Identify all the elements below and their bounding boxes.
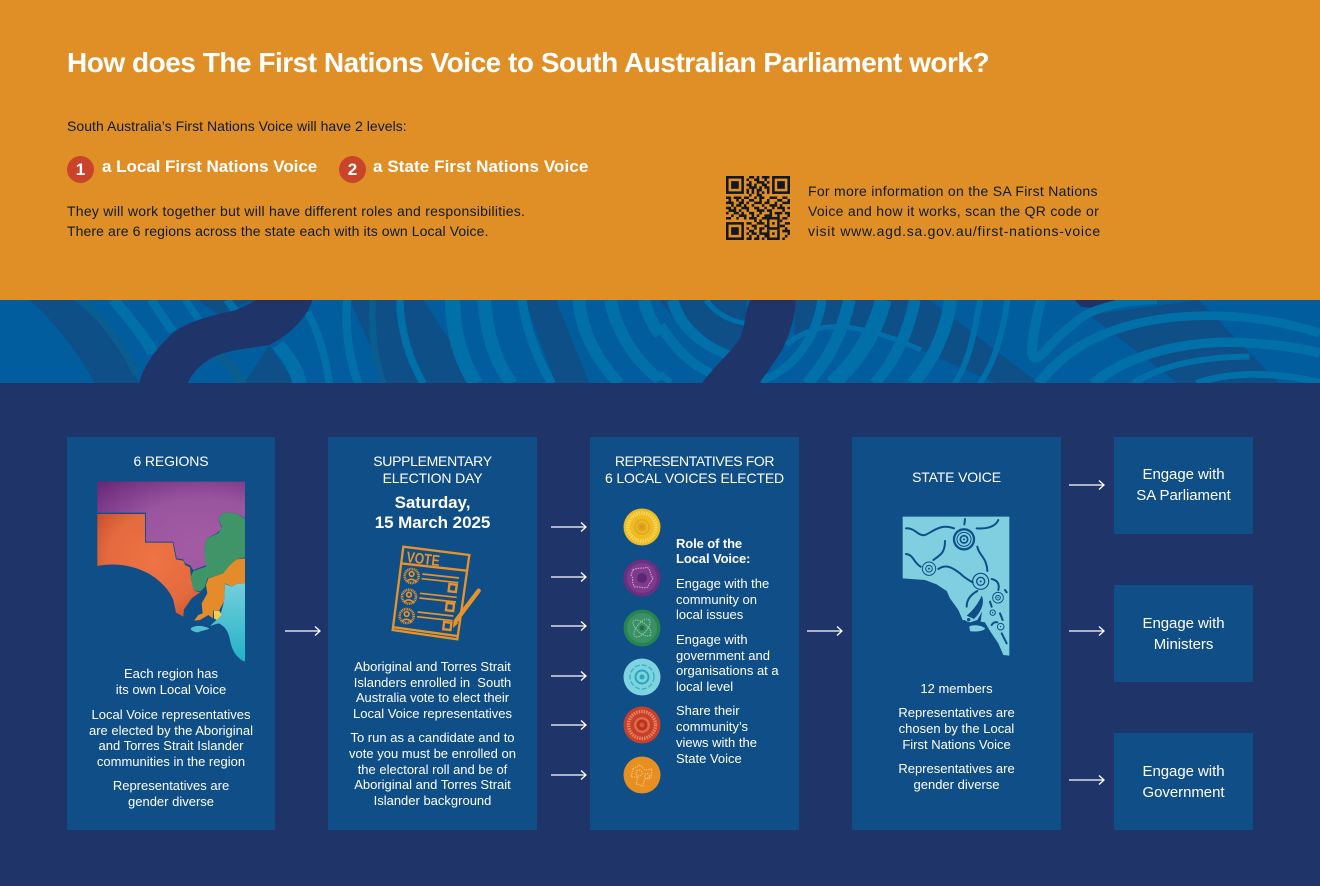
label: SA Parliament: SA Parliament [1136,487,1231,504]
label: Ministers: Ministers [1154,636,1213,653]
text: candidate eligibility: vote you must be enrolled on [349,746,516,761]
level 1 badge [67,156,94,183]
text: gender diverse: gender diverse [128,794,214,809]
icon: yellow coin [624,508,660,546]
text: chosen by local voice: Representatives are [898,705,1015,720]
role: government: organisations at a [676,663,779,678]
label: Ministers [1142,615,1224,653]
heading: 6 regions: 6 REGIONS [134,453,208,469]
role: community: Engage with the [676,576,769,591]
icon: red coin [624,706,660,744]
panel: representatives for 6 local voices [590,437,799,830]
text: candidate eligibility [349,730,516,808]
arrows: election to local voices [551,522,587,780]
text: who votes: Australia vote to elect their [356,690,509,705]
swoosh right [702,300,796,383]
QR information text [808,183,1101,239]
text: gender diverse: gender diverse [914,777,1000,792]
icon: orange coin [624,756,660,794]
region: orange [194,558,245,621]
text: who votes: Islanders enrolled in South [354,675,511,690]
region: red [97,514,200,617]
QR information text: visit www.agd.sa.gov.au/first-nations-voice [808,223,1101,239]
icon: ballot paper [391,545,481,641]
intro text: South Australia’s First Nations Voice will have 2 levels: [67,118,407,134]
text: local voice [116,666,226,697]
title: How does The First Nations Voice to South Australian Parliament work? [67,47,989,78]
text: candidate eligibility: To run as a candidate and to [350,730,515,745]
level 2 label: a State First Nations Voice [373,157,588,176]
label: SA Parliament: Engage with [1142,466,1224,483]
icon: green coin [624,610,660,646]
island [191,626,209,632]
role: community: local issues [676,607,743,622]
roles text [67,203,525,239]
role: community [676,576,769,622]
region: yellow [214,611,222,620]
icon: ballot paper: VOTE [406,549,441,570]
text: who votes: Aboriginal and Torres Strait [354,659,511,674]
heading: supplementary election day: ELECTION DAY [383,470,482,486]
header panel [0,0,1320,300]
text: local voice: its own Local Voice [116,682,226,697]
panel: state voice [852,437,1061,830]
QR information text: For more information on the SA First Nations [808,183,1098,199]
election date: 15 March 2025 [375,513,490,532]
region: cyan [210,583,245,662]
text: candidate eligibility: Aboriginal and Torres Strait [354,777,511,792]
arrow: local voices to state voice [807,626,843,636]
role: government: local level [676,679,733,694]
role heading: Local Voice: [676,551,750,566]
panel: 6 regions [67,437,275,830]
level 1 badge: 1 [76,160,85,179]
role heading: Role of the [676,536,742,551]
heading: representatives elected: REPRESENTATIVES FOR [615,453,774,469]
text: representatives elected: and Torres Strait Islander [98,738,244,753]
text: representatives elected: communities in the region [97,754,245,769]
roles text: They will work together but will have different roles and responsibilities. [67,203,525,219]
roles text: There are 6 regions across the state each with its own Local Voice. [67,223,488,239]
role: government: government and [676,648,770,663]
role: views: Share their [676,703,740,718]
level 2 badge: 2 [348,160,357,179]
text: members: 12 members [920,681,993,696]
heading: supplementary election day: SUPPLEMENTARY [373,453,492,469]
QR information text: Voice and how it works, scan the QR code or [808,203,1099,219]
role: government [676,632,779,694]
icon: cyan coin [624,658,660,696]
panel: engage with Government [1114,733,1253,830]
label: Government: Government [1142,784,1225,801]
text: chosen by local voice [898,705,1015,752]
map: state voice [902,516,1010,656]
panel: engage with Ministers [1114,585,1253,682]
text: gender diverse [898,761,1015,792]
text: representatives elected: Local Voice representatives [92,707,250,722]
text: candidate eligibility: the electoral roll and be of [358,762,507,777]
patterned band [0,300,1320,383]
heading: representatives elected [605,453,784,486]
role heading [676,536,750,566]
text: chosen by local voice: chosen by the Local [899,721,1014,736]
text: local voice: Each region has [124,666,218,681]
arrow: regions to election [285,626,321,636]
text: gender diverse: Representatives are [113,778,229,793]
region: purple [97,482,245,570]
heading: representatives elected: 6 LOCAL VOICES ELECTED [605,470,784,486]
election date [375,493,490,532]
text: candidate eligibility: Islander background [374,793,491,808]
label: Government: Engage with [1142,763,1224,780]
text: gender diverse: Representatives are [898,761,1015,776]
QR code [726,176,790,240]
text: chosen by local voice: First Nations Voice [902,737,1011,752]
text: representatives elected [89,707,253,769]
panel: supplementary election day [328,437,537,830]
label: SA Parliament [1136,466,1231,504]
heading: supplementary election day [373,453,492,486]
election date: Saturday, [395,493,470,512]
text: representatives elected: are elected by the Aboriginal [89,723,253,738]
icon: purple coin [624,560,660,596]
role: views: State Voice [676,751,742,766]
panel: engage with SA Parliament [1114,437,1253,534]
role: community: community on [676,592,757,606]
map: 6 regions of South Australia [97,482,245,662]
role: government: Engage with [676,632,748,647]
role: views [676,703,757,766]
label: Ministers: Engage with [1142,615,1224,632]
region: green [191,513,245,591]
role: views: community’s [676,719,748,734]
text: gender diverse [113,778,229,809]
level 2 badge [339,156,366,183]
label: Government [1142,763,1225,801]
text: who votes: Local Voice representatives [353,706,512,721]
swoosh left [139,300,312,383]
role: views: views with the [676,735,757,750]
arrows: state voice to engagement [1069,480,1105,785]
heading: state voice: STATE VOICE [912,469,1001,485]
level 1 label: a Local First Nations Voice [102,157,317,176]
text: who votes [353,659,512,721]
